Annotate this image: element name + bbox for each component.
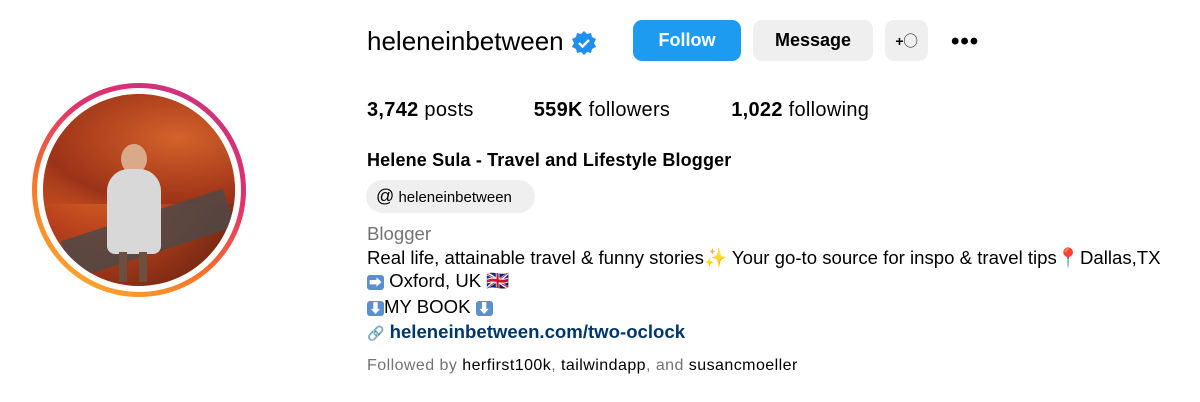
bio: 🔗 heleneinbetween.com/two-oclock xyxy=(367,321,685,342)
stats: 3,742 posts 559K followers 1,022 following xyxy=(367,99,869,121)
icon: verified xyxy=(572,31,596,55)
threads pill xyxy=(366,180,535,213)
button: follow xyxy=(633,20,741,61)
bio: ➡ Oxford, UK 🇬🇧 xyxy=(369,270,509,291)
button: follow: Follow xyxy=(658,30,716,50)
photo xyxy=(43,94,235,286)
followed by: Followed by herfirst100k, tailwindapp, and susancmoeller xyxy=(367,357,798,374)
bio: Blogger xyxy=(367,223,431,244)
bio xyxy=(367,223,1161,342)
threads pill: @ heleneinbetween xyxy=(376,186,512,206)
name: Helene Sula - Travel and Lifestyle Blogger xyxy=(367,150,731,170)
button: message xyxy=(753,20,873,61)
button: message: Message xyxy=(775,30,851,50)
username: heleneinbetween xyxy=(367,26,564,56)
avatar xyxy=(32,83,246,297)
bio: Real life, attainable travel & funny stories✨ Your go-to source for inspo & travel tips📍Dallas,TX xyxy=(367,246,1161,268)
bio: ⬇MY BOOK ⬇ xyxy=(369,296,491,316)
icon: more: ••• xyxy=(951,28,979,55)
button: add person xyxy=(885,20,928,61)
button: add person: +◯ xyxy=(895,32,918,48)
